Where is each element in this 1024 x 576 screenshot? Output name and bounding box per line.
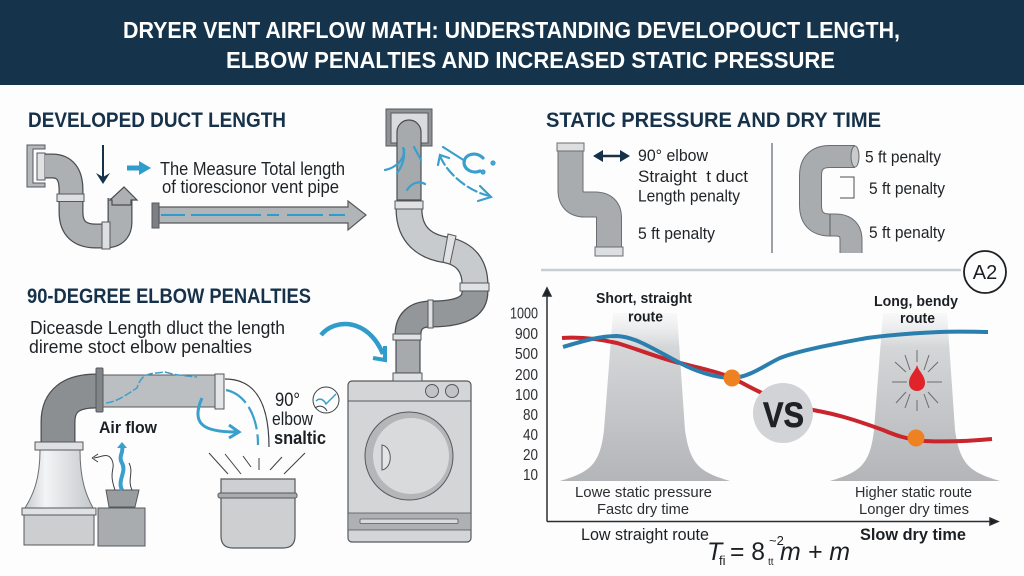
title: DRYER VENT AIRFLOW MATH: UNDERSTANDING DEVELOPOUCT LENGTH, xyxy=(123,17,900,43)
text: measure total length: of tiorescionor vent pipe xyxy=(162,177,339,197)
icon: multi-bend duct xyxy=(810,146,859,253)
formula: T xyxy=(707,538,724,566)
VS badge: VS xyxy=(763,396,804,435)
text: multi-bend penalties: 5 ft penalty xyxy=(865,148,941,166)
labels: route titles xyxy=(596,290,959,327)
icon: heat source with rising air xyxy=(92,442,145,546)
marker left xyxy=(724,370,740,386)
text: elbow description: Diceasde Length dluct the length xyxy=(30,318,285,338)
header banner xyxy=(0,0,1024,85)
icon: red pressure burst xyxy=(892,350,942,411)
y axis labels: 10 xyxy=(523,467,538,484)
illustration: dryer machine xyxy=(348,381,471,542)
icon: straight duct arrow xyxy=(152,201,366,230)
labels: route titles: Short, straight xyxy=(596,290,692,307)
chart: route bell left xyxy=(560,313,730,481)
text: multi-bend penalties: 5 ft penalty xyxy=(869,223,945,242)
labels: route outcomes: Longer dry times xyxy=(859,501,969,518)
chart: route bell right xyxy=(830,313,1000,481)
badge: A2 xyxy=(964,251,1006,293)
formula: fi xyxy=(719,553,726,568)
text: offset duct labels: 90° elbow xyxy=(638,146,709,165)
y axis labels: 500 xyxy=(515,346,538,363)
y axis labels: 100 xyxy=(515,387,538,404)
y axis labels: 200 xyxy=(515,367,538,384)
text: offset duct labels: Straight t duct xyxy=(638,167,748,186)
badge: A2: A2 xyxy=(973,262,997,284)
label: 90 degree elbow: 90° xyxy=(275,390,300,411)
y axis labels: 1000 xyxy=(510,306,538,322)
text: offset duct labels xyxy=(638,146,748,243)
red line xyxy=(562,338,992,441)
text: elbow description xyxy=(29,318,285,357)
formula: tt xyxy=(768,557,774,568)
arrow: blue pointer xyxy=(127,161,151,175)
label: 90 degree elbow: snaltic xyxy=(274,428,326,448)
chart: static pressure vs dry time xyxy=(510,288,1000,544)
illustration: vertical duct run xyxy=(386,109,489,381)
labels: x axis: Slow dry time xyxy=(860,525,966,544)
icon: lint bucket xyxy=(209,453,305,548)
labels: route outcomes: Fastc dry time xyxy=(597,501,689,518)
labels: route outcomes: Lowe static pressure xyxy=(575,484,712,501)
y axis labels: 20 xyxy=(523,447,538,464)
label: 90 degree elbow xyxy=(272,390,326,448)
arrow: down xyxy=(96,145,110,184)
y axis labels xyxy=(510,306,538,484)
labels: route titles: route xyxy=(628,308,663,326)
formula: ~2 xyxy=(769,533,784,548)
arrow: double headed xyxy=(593,150,630,162)
text: elbow description: direme stoct elbow penalties xyxy=(29,337,252,357)
y axis labels: 900 xyxy=(515,326,538,343)
heading: 90-degree elbow penalties: 90-DEGREE ELBOW PENALTIES xyxy=(27,284,311,308)
formula xyxy=(707,533,850,568)
label: air flow: Air flow xyxy=(99,418,158,437)
text: multi-bend penalties xyxy=(865,148,945,242)
icon: check badge xyxy=(313,387,339,413)
text: offset duct labels: Length penalty xyxy=(638,186,740,206)
labels: route titles: Long, bendy xyxy=(874,293,959,310)
arrow: big curved blue xyxy=(321,324,385,360)
heading: developed duct length: DEVELOPED DUCT LENGTH xyxy=(28,108,286,132)
formula: = 8 xyxy=(730,538,765,566)
title: ELBOW PENALTIES AND INCREASED STATIC PRESSURE xyxy=(226,47,835,73)
icon: U-bend duct with flange xyxy=(27,145,137,249)
heading: static pressure and dry time: STATIC PRESSURE AND DRY TIME xyxy=(546,108,881,132)
formula: m + m xyxy=(780,538,850,566)
labels: x axis xyxy=(581,525,966,544)
labels: route outcomes xyxy=(575,484,972,518)
blue line xyxy=(563,332,988,378)
arrows: elbow airflow xyxy=(198,390,258,445)
VS badge xyxy=(753,383,813,443)
illustration: vent hood and elbow duct xyxy=(22,368,269,545)
labels: route outcomes: Higher static route xyxy=(855,484,972,501)
label: 90 degree elbow: elbow xyxy=(272,409,314,429)
labels: route titles: route xyxy=(900,310,935,327)
text: measure total length xyxy=(160,159,345,197)
icon: swirling vent air xyxy=(385,147,494,201)
y axis and x axis xyxy=(543,288,998,525)
marker right xyxy=(908,430,924,446)
y axis labels: 40 xyxy=(523,427,538,444)
text: measure total length: The Measure Total length xyxy=(160,159,345,179)
text: multi-bend penalties: 5 ft penalty xyxy=(869,179,945,198)
y axis labels: 80 xyxy=(523,407,538,424)
title xyxy=(123,17,900,73)
icon: offset duct xyxy=(557,143,623,256)
labels: x axis: Low straight route xyxy=(581,525,709,544)
text: offset duct labels: 5 ft penalty xyxy=(638,224,715,243)
